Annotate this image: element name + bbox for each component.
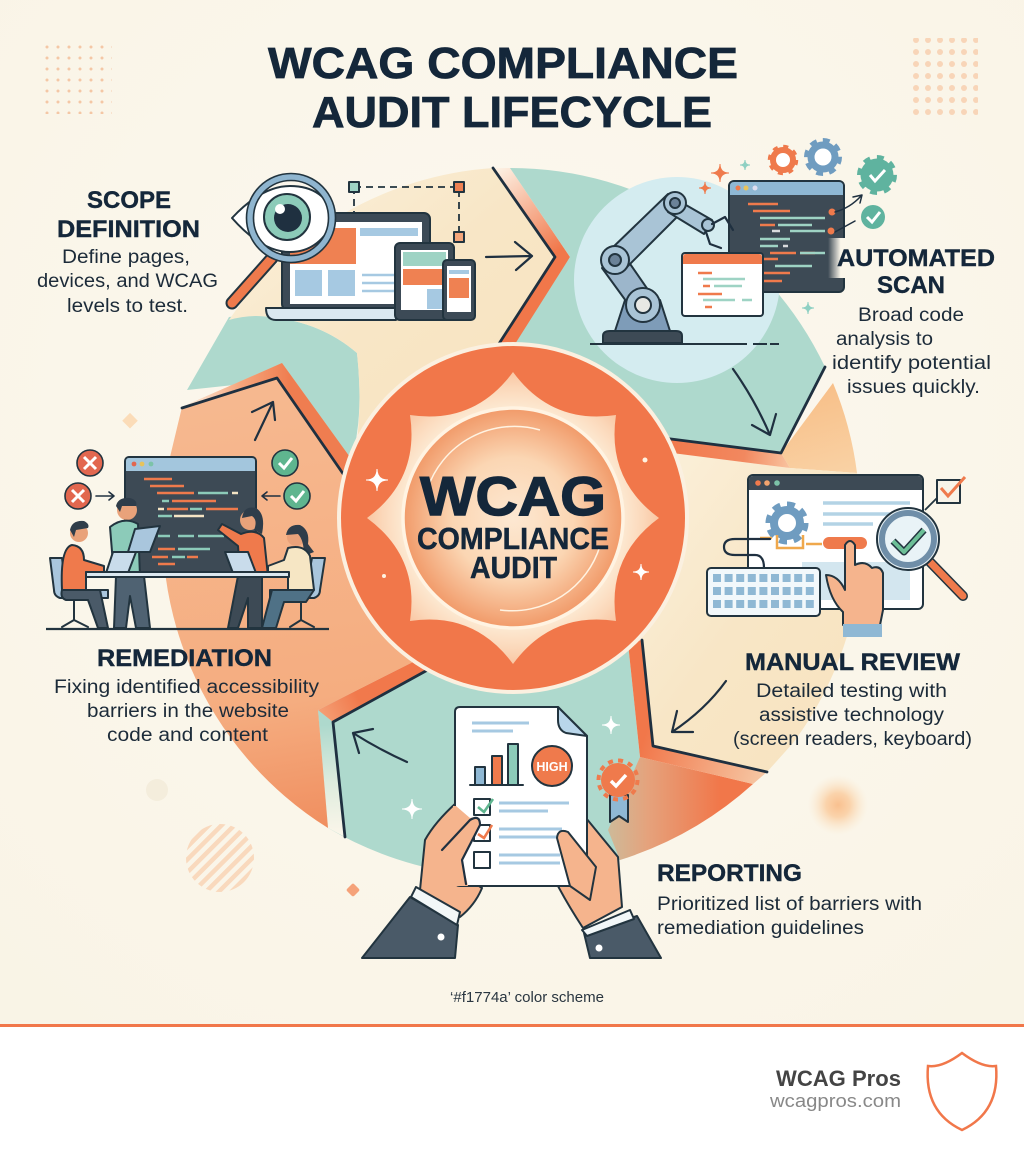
gear <box>774 510 800 536</box>
table <box>86 572 289 577</box>
robot gripper <box>706 217 733 248</box>
segment: teal blob behind remediation <box>187 316 360 470</box>
colour scheme caption: ‘#f1774a’ color scheme <box>450 990 604 1006</box>
pale blue disc <box>574 177 780 383</box>
segment: automated orange band <box>650 438 790 468</box>
tablet <box>395 243 454 320</box>
chairs <box>50 558 108 598</box>
floor <box>46 628 329 630</box>
segment: manual review <box>630 453 862 772</box>
hub subtitle line two: AUDIT <box>470 550 557 585</box>
right palm <box>555 818 622 928</box>
text: remediation <box>54 645 320 746</box>
eye and lens <box>232 186 335 252</box>
text: scope definition: DEFINITION <box>57 216 200 243</box>
robot arm lower <box>602 258 655 312</box>
segment: reporting left fade <box>318 710 345 837</box>
code window <box>729 181 844 292</box>
magnifier handle <box>232 258 272 303</box>
hub orange disc <box>341 346 685 690</box>
segment: reporting <box>318 643 640 877</box>
footer brand name: WCAG Pros <box>776 1066 901 1091</box>
high priority badge <box>532 746 572 786</box>
text: automated scan: AUTOMATED <box>837 245 995 272</box>
small report window <box>682 253 763 316</box>
arrow: remediation to scope <box>252 402 275 440</box>
text: manual review <box>733 649 972 750</box>
icon: white sparkles <box>402 716 620 819</box>
segment: manual review wedge <box>781 383 857 473</box>
icon: remediation team and code screen <box>46 450 329 629</box>
text: reporting <box>657 860 922 939</box>
hub inner arc <box>427 426 600 611</box>
text: automated scan: SCAN <box>877 272 945 299</box>
orange pill <box>823 537 867 549</box>
left sleeve <box>362 897 458 958</box>
right cuff <box>582 910 634 936</box>
text: scope definition: Define pages, <box>62 247 190 268</box>
text: automated scan <box>832 245 995 398</box>
code lines <box>144 479 238 564</box>
text: automated scan: Broad code <box>858 305 964 326</box>
award ribbon <box>598 760 638 822</box>
cuff buttons <box>438 934 444 940</box>
person standing pointing <box>218 507 268 628</box>
text: remediation: barriers in the website <box>87 701 289 722</box>
error icons <box>65 450 114 509</box>
high priority badge: HIGH <box>536 760 568 774</box>
code lines <box>748 204 825 281</box>
gears <box>773 150 793 170</box>
text: automated scan: identify potential <box>832 353 991 374</box>
segment: reporting orange band <box>318 660 433 722</box>
segment: scope orange chevron <box>480 168 570 370</box>
hub subtitle line one: COMPLIANCE <box>417 521 609 556</box>
laptops <box>106 552 136 573</box>
arrow: manual to reporting <box>672 681 726 732</box>
segment: remediation orange band <box>182 363 352 478</box>
hub title: WCAG <box>420 465 606 527</box>
footer url: wcagpros.com <box>769 1091 901 1111</box>
right sleeve <box>584 916 661 958</box>
arrow: scope to scan <box>486 242 532 270</box>
central hub <box>337 342 689 694</box>
left thumb outline <box>442 818 480 884</box>
title: WCAG COMPLIANCE <box>268 39 738 88</box>
sleeve <box>843 624 882 637</box>
icon: automated scan robot and code <box>574 140 895 383</box>
segment outlines <box>182 168 825 837</box>
hub star burst <box>367 372 659 664</box>
robot arm upper <box>608 194 682 272</box>
lifecycle ring segments <box>162 168 862 877</box>
segment: remediation <box>162 363 417 828</box>
title: AUDIT LIFECYCLE <box>312 88 712 137</box>
segment: automated scan <box>510 168 825 453</box>
laptop <box>282 213 430 310</box>
text: reporting: Prioritized list of barriers with <box>657 894 922 915</box>
icon: footer shield <box>928 1053 996 1130</box>
text: reporting: REPORTING <box>657 860 802 887</box>
hand <box>826 541 883 625</box>
selection handles <box>349 182 359 192</box>
cable <box>724 539 770 568</box>
icon: reporting document and hands <box>362 707 661 958</box>
text: remediation: code and content <box>107 725 269 746</box>
ground line <box>590 343 779 345</box>
text: reporting: remediation guidelines <box>657 918 864 939</box>
text: scope definition <box>37 187 218 317</box>
success icons <box>262 450 310 509</box>
text: remediation: Fixing identified accessibility <box>54 677 320 698</box>
arrow: scan to manual <box>733 369 776 435</box>
scan arrows <box>835 195 862 232</box>
decorative background accents <box>44 38 978 897</box>
text: automated scan: analysis to <box>836 329 933 350</box>
robot forearm <box>668 197 712 234</box>
left thumb <box>452 806 480 886</box>
sparkles <box>699 164 729 194</box>
text: manual review: assistive technology <box>759 705 945 726</box>
icon: scope eye, laptop and devices <box>232 174 475 320</box>
text: scope definition: levels to test. <box>67 296 188 317</box>
segment: manual orange band <box>628 640 767 784</box>
text: automated scan: issues quickly. <box>847 377 980 398</box>
left cuff <box>411 887 460 925</box>
phone <box>443 260 475 320</box>
document <box>455 707 587 886</box>
text: scope definition: devices, and WCAG <box>37 271 218 292</box>
text: manual review: MANUAL REVIEW <box>745 649 960 676</box>
footer band <box>0 1024 1024 1154</box>
hub dots <box>382 458 648 578</box>
icon: manual review window, keyboard, hand <box>707 475 965 637</box>
left palm <box>415 803 482 917</box>
segment: reporting orange wedge <box>608 757 753 860</box>
magnifier <box>930 562 963 596</box>
dashed selection frame <box>354 187 459 260</box>
code screen <box>125 457 256 573</box>
hub sparkles <box>366 469 649 580</box>
arrow: reporting to remediation <box>353 729 407 762</box>
person seated right <box>262 525 314 628</box>
right thumb <box>557 831 596 900</box>
person seated left <box>62 521 108 628</box>
title <box>268 39 738 137</box>
robot joints <box>626 288 660 322</box>
segment: scope definition <box>229 168 555 440</box>
text: manual review: Detailed testing with <box>756 681 947 702</box>
browser window <box>748 475 923 609</box>
person standing with tablet <box>110 498 160 628</box>
code window fade <box>828 238 846 278</box>
hub halo <box>337 342 689 694</box>
text: manual review: (screen readers, keyboard) <box>733 729 972 750</box>
text: scope definition: SCOPE <box>87 187 171 214</box>
checklist <box>474 799 569 868</box>
keyboard <box>707 568 820 616</box>
hub inner disc <box>403 408 623 628</box>
bar chart <box>470 744 523 785</box>
robot base <box>603 331 682 343</box>
text: remediation: REMEDIATION <box>97 645 272 672</box>
orange connector <box>760 535 822 548</box>
